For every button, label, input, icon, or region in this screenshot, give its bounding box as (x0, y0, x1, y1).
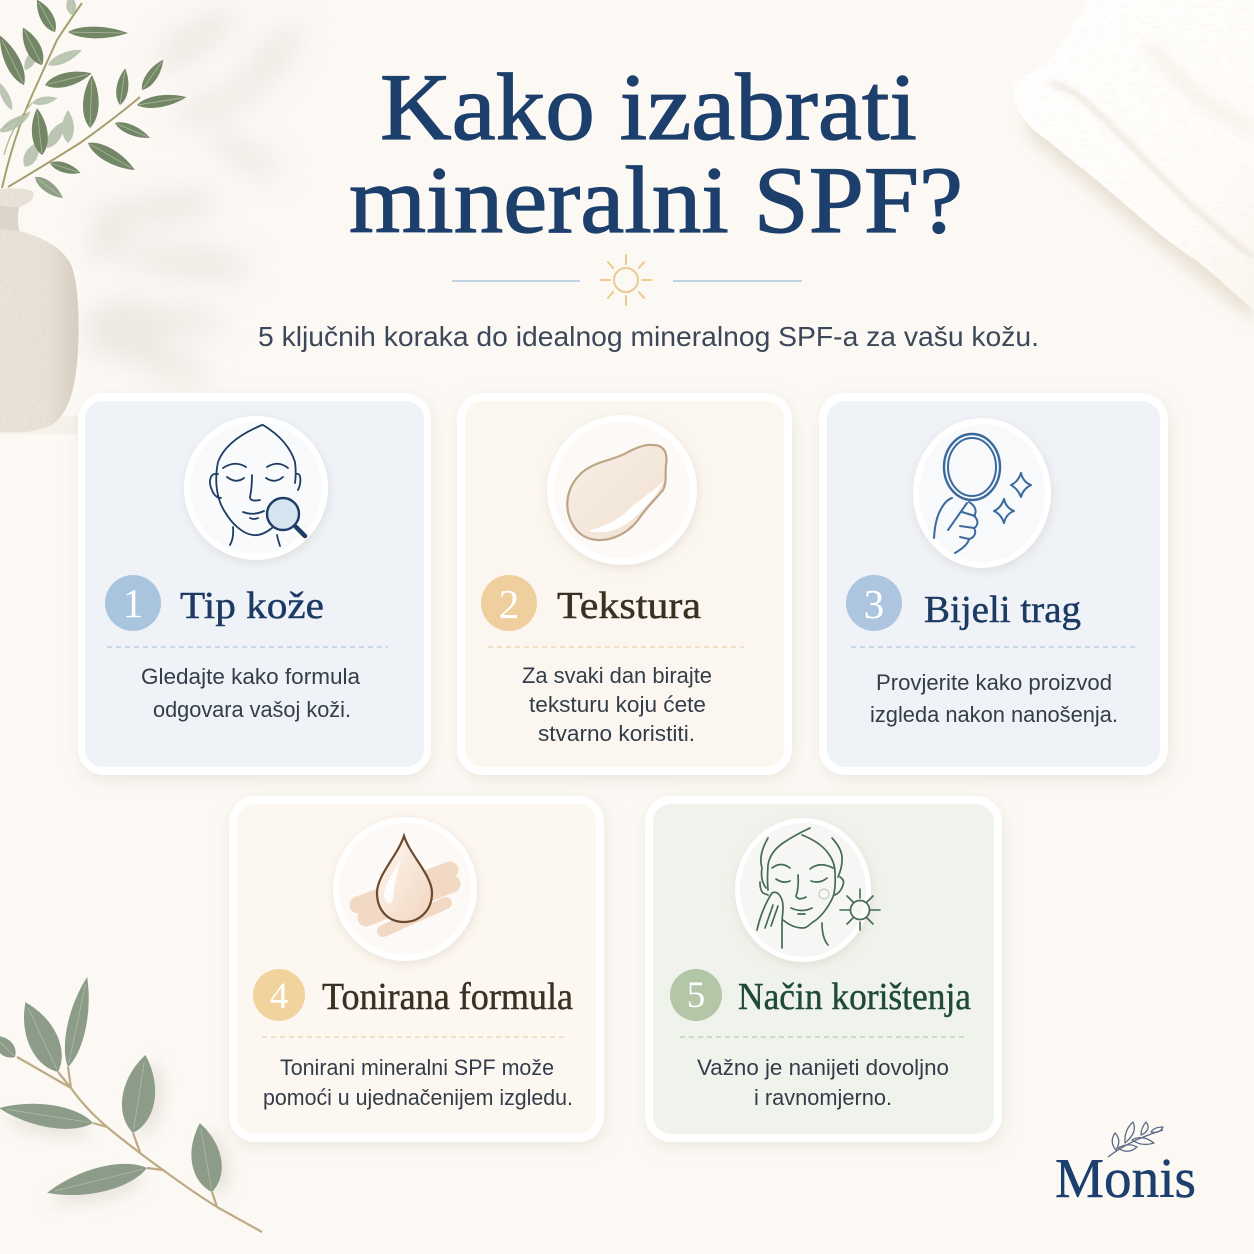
text: step 5 description (697, 1055, 949, 1110)
title: mineralni SPF? (349, 147, 963, 253)
icon: cream swatch (547, 415, 697, 565)
text: step 4 description: Tonirani mineralni SPF može (280, 1055, 554, 1080)
text: step 2 description: Za svaki dan birajte (522, 663, 712, 688)
text: step 3 description: izgleda nakon nanošenja. (870, 702, 1118, 727)
icon: face applying cream with sun (735, 818, 880, 962)
text: step 4 description: pomoći u ujednačenijem izgledu. (263, 1085, 573, 1110)
heading: Tekstura: Tekstura (557, 585, 701, 627)
panel: step 4 tinted formula (229, 796, 604, 1142)
number badge 3: 3 (864, 581, 884, 627)
title: Kako izabrati (380, 54, 917, 160)
heading: Bijeli trag: Bijeli trag (924, 589, 1081, 631)
heading: Tonirana formula: Tonirana formula (322, 976, 573, 1018)
text: step 5 description: i ravnomjerno. (754, 1085, 892, 1110)
olive branch top left (0, 0, 187, 202)
number badge 5: 5 (687, 975, 705, 1016)
panel: step 1 skin type (78, 393, 431, 775)
panel: step 2 texture (457, 393, 792, 775)
logo: Monis: Monis (1055, 1148, 1196, 1210)
number badge 5 (670, 969, 722, 1021)
olive branch bottom left (0, 975, 262, 1232)
text: step 1 description: Gledajte kako formula (141, 664, 361, 689)
logo: Monis (1055, 1122, 1196, 1210)
heading: Tip kože: Tip kože (180, 585, 324, 627)
panel: step 5 how to use (645, 796, 1002, 1142)
icon: face with magnifier (184, 416, 328, 560)
number badge 4 (253, 969, 305, 1021)
number badge 1 (105, 575, 161, 631)
icon: hand mirror with sparkles (913, 418, 1051, 568)
text: step 2 description: stvarno koristiti. (538, 721, 695, 746)
divider with sun icon (452, 255, 802, 305)
vase (0, 188, 79, 432)
text: step 1 description: odgovara vašoj koži. (153, 697, 351, 722)
text: step 1 description (141, 664, 361, 722)
wall shadow of foliage (82, 0, 312, 391)
text: step 4 description (263, 1055, 573, 1110)
towel (1013, 0, 1254, 322)
panel: step 3 white cast (819, 393, 1168, 775)
text: step 3 description (870, 670, 1118, 727)
number badge 4: 4 (270, 976, 288, 1017)
number badge 1: 1 (123, 580, 143, 626)
text: step 5 description: Važno je nanijeti dovoljno (697, 1055, 949, 1080)
title (349, 54, 963, 253)
tabletop edge behind vase (0, 416, 80, 434)
number badge 2 (481, 575, 537, 631)
text: step 3 description: Provjerite kako proizvod (876, 670, 1112, 695)
text: step 2 description: teksturu koju ćete (529, 692, 706, 717)
number badge 2: 2 (499, 581, 519, 627)
subtitle: 5 ključnih koraka do idealnog mineralnog SPF-a za vašu kožu. (258, 321, 1039, 352)
text: step 2 description (522, 663, 712, 746)
number badge 3 (846, 575, 902, 631)
heading: Način korištenja: Način korištenja (738, 976, 971, 1018)
icon: tinted drop (333, 817, 477, 961)
